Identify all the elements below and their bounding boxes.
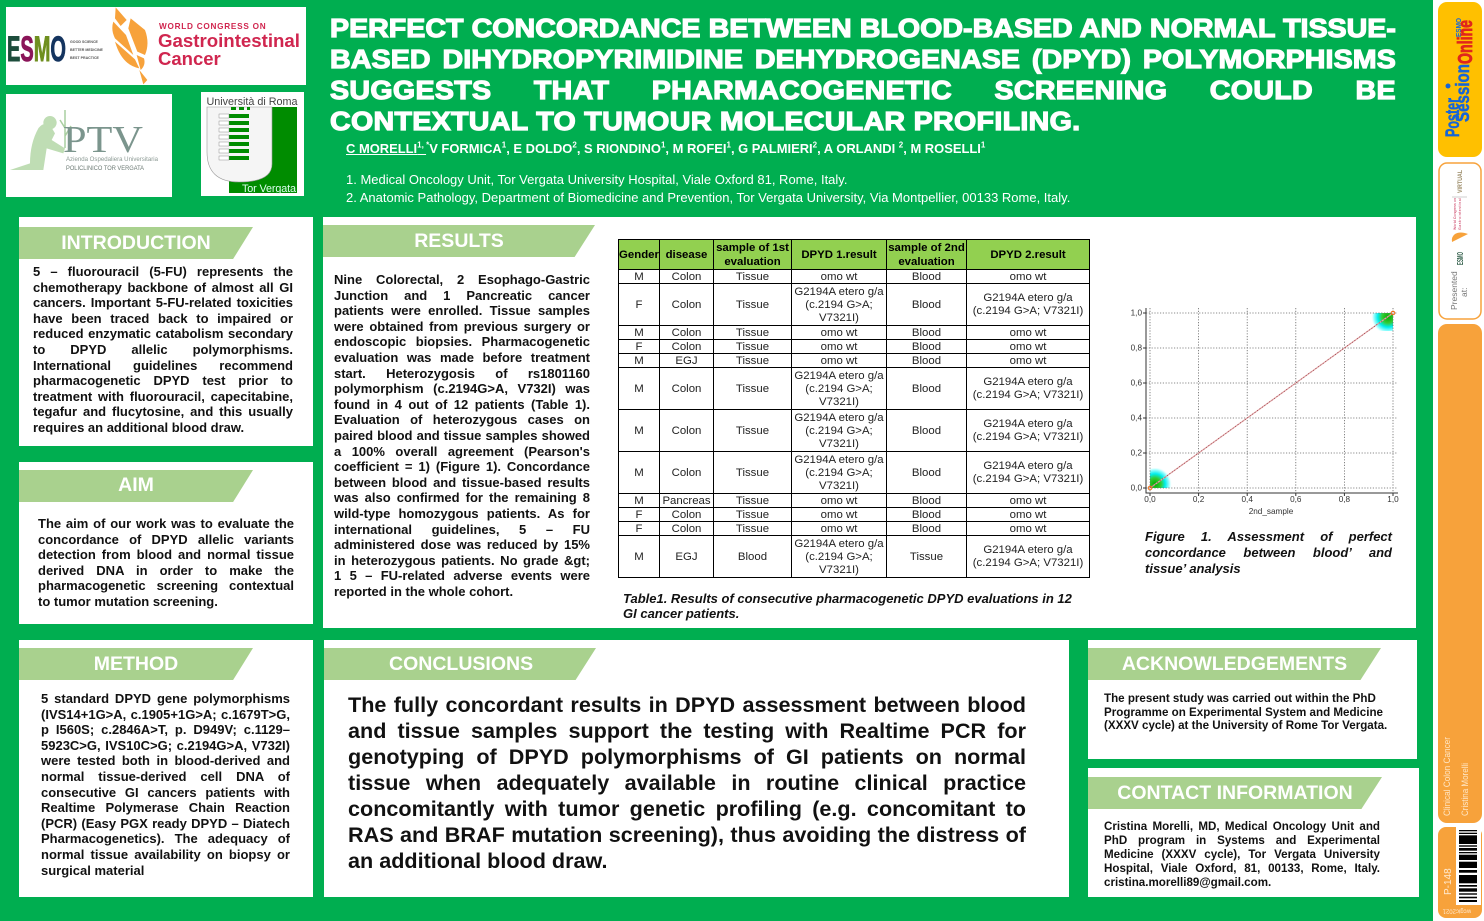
text: results	[334, 272, 590, 599]
text: acknowledgements: Programme on Experimental System and Medicine	[1104, 706, 1383, 718]
chart: scatter of 1st vs 2nd sample: 0,4	[1131, 414, 1142, 422]
text: introduction: International guidelines recommend	[33, 358, 293, 373]
text: introduction	[33, 264, 293, 435]
table: pharmacogenetic results: M	[634, 495, 644, 507]
text: introduction: have been traced back to impaired or	[33, 311, 293, 326]
figure caption: tissue’ analysis	[1145, 560, 1241, 576]
table: pharmacogenetic results: F	[636, 523, 642, 535]
text: aim: derived DNA in order to make the	[38, 563, 294, 578]
text: contact information: PhD program in Systems and Experimental	[1104, 834, 1380, 847]
panel: method	[19, 640, 313, 897]
logo: PTV Policlinico Tor Vergata	[6, 94, 172, 197]
table: pharmacogenetic results: M	[634, 425, 644, 437]
panel: contact information	[1088, 768, 1419, 897]
text: introduction: tegafur and flucytosine, and this usually	[33, 404, 293, 419]
sidebar: presented at panel: Presented	[1449, 271, 1459, 310]
logo: ESMO World Congress on Gastrointestinal Cancer: Cancer	[158, 48, 221, 69]
table: pharmacogenetic results: omo wt	[1010, 327, 1046, 339]
table: pharmacogenetic results: Colon	[672, 341, 701, 353]
table caption: GI cancer patients.	[623, 606, 739, 621]
text: method: consecutive GI cancers patients with	[41, 785, 290, 800]
table: pharmacogenetic results: disease	[666, 248, 707, 260]
table: pharmacogenetic results: Tissue	[736, 509, 769, 521]
sidebar: abstract number and barcode: wcgic2021	[1442, 908, 1472, 914]
icon: leaf	[112, 7, 147, 84]
table: pharmacogenetic results: Colon	[672, 425, 701, 437]
table: pharmacogenetic results: Blood	[912, 271, 941, 283]
logo: ESMO World Congress on Gastrointestinal Cancer: BEST PRACTICE	[70, 56, 100, 60]
table: pharmacogenetic results: (c.2194 G>A; V7321I)	[973, 389, 1083, 401]
table: pharmacogenetic results: G2194A etero g/a	[983, 418, 1073, 430]
text: results: evaluation was made before treatment	[334, 350, 590, 365]
table: pharmacogenetic results: V7321I)	[819, 396, 859, 408]
text: method	[41, 691, 290, 878]
figure caption: concordance between blood’ and	[1145, 544, 1392, 560]
text: method: 5 standard DPYD gene polymorphisms	[41, 691, 290, 706]
text: introduction: chemotherapy backbone of almost all GI	[33, 280, 293, 295]
table: pharmacogenetic results: (c.2194 G>A; V7321I)	[973, 473, 1083, 485]
text: method: Pharmacogenetics). The adequacy of	[41, 831, 290, 846]
heading: conclusions	[324, 648, 596, 680]
table: pharmacogenetic results: omo wt	[821, 495, 857, 507]
heading: aim	[19, 470, 253, 502]
text: conclusions: an additional blood draw.	[348, 848, 608, 873]
heading: method: METHOD	[94, 653, 178, 675]
panel: results	[323, 217, 1416, 628]
table: pharmacogenetic results: G2194A etero g/a	[794, 538, 884, 550]
table: pharmacogenetic results: omo wt	[821, 271, 857, 283]
title: CONTEXTUAL TO TUMOUR MOLECULAR PROFILING.	[330, 106, 1080, 136]
text: conclusions: The fully concordant results in DPYD assessment between blood	[348, 692, 1026, 717]
table: pharmacogenetic results: EGJ	[675, 551, 698, 563]
text: aim: detection from blood and normal tissue	[38, 547, 294, 562]
table: pharmacogenetic results: EGJ	[675, 355, 698, 367]
sidebar: poster session online badge: ESMO	[1456, 17, 1463, 37]
text: contact information	[1104, 820, 1380, 889]
chart: scatter of 1st vs 2nd sample: 0,6	[1290, 495, 1302, 504]
table: pharmacogenetic results: Colon	[672, 383, 701, 395]
table: pharmacogenetic results: Blood	[912, 425, 941, 437]
table: pharmacogenetic results: omo wt	[1010, 271, 1046, 283]
logo: Università di Roma Tor Vergata: Università di Roma	[206, 96, 298, 108]
text: results: Evaluation of heterozygous cases on	[334, 412, 590, 427]
text: introduction: pharmacogenetic DPYD test prior to	[33, 373, 293, 388]
table: pharmacogenetic results: Tissue	[736, 523, 769, 535]
text: introduction: cancers. Important 5-FU-related toxicities	[33, 295, 293, 310]
logo: PTV Policlinico Tor Vergata: Azienda Ospedaliera Universitaria	[66, 156, 159, 163]
sidebar: abstract number and barcode: P-148	[1443, 868, 1454, 895]
table: pharmacogenetic results: (c.2194 G>A;	[805, 467, 873, 479]
table: pharmacogenetic results: omo wt	[1010, 495, 1046, 507]
table: pharmacogenetic results: Tissue	[736, 495, 769, 507]
text: results: start. Heterozygosis of rs1801160	[334, 366, 590, 381]
table: pharmacogenetic results: F	[636, 509, 642, 521]
sidebar: topic and presenter panel: Cristina Morelli	[1460, 763, 1471, 816]
heading: contact information: CONTACT INFORMATION	[1117, 782, 1353, 804]
table: pharmacogenetic results: V7321I)	[819, 564, 859, 576]
table: pharmacogenetic results: Gender	[619, 248, 659, 260]
table: pharmacogenetic results: Blood	[912, 341, 941, 353]
text: results: endoscopic biopsies. Pharmacogenetic	[334, 334, 590, 349]
table: pharmacogenetic results: Blood	[738, 551, 767, 563]
logo: ESMO World Congress on Gastrointestinal Cancer: GOOD SCIENCE	[70, 40, 99, 44]
text: results: coefficient = 1) (Figure 1). Concordance	[334, 459, 590, 474]
table: pharmacogenetic results: Colon	[672, 271, 701, 283]
sidebar: poster session online badge: Session	[1453, 64, 1474, 122]
chart: scatter of 1st vs 2nd sample: 0,2	[1193, 495, 1205, 504]
text: method: were tested both in blood-derived and	[41, 753, 290, 768]
panel: conclusions	[324, 640, 1069, 897]
text: conclusions: tissue when adequately available in routine clinical practice	[348, 770, 1026, 795]
table: pharmacogenetic results: Colon	[672, 467, 701, 479]
text: aim: concordance of DPYD allelic variants	[38, 532, 294, 547]
text: introduction: reduced enzymatic catabolism secondary	[33, 326, 293, 341]
table: pharmacogenetic results: sample of 1st	[716, 242, 789, 254]
logo: PTV Policlinico Tor Vergata: POLICLINICO TOR VERGATA	[66, 165, 145, 172]
chart: scatter of 1st vs 2nd sample: 1,0	[1387, 495, 1399, 504]
text: contact information: Cristina Morelli, MD, Medical Oncology Unit and	[1104, 820, 1380, 833]
table: pharmacogenetic results: V7321I)	[819, 438, 859, 450]
title: SUGGESTS THAT PHARMACOGENETIC SCREENING COULD BE	[330, 74, 1396, 104]
text: results: were obtained from previous surgery or	[334, 319, 590, 334]
sidebar: abstract number and barcode	[1438, 827, 1482, 918]
table: pharmacogenetic results: Tissue	[736, 355, 769, 367]
table: pharmacogenetic results: Blood	[912, 495, 941, 507]
sidebar: topic and presenter panel: Clinical Colon Cancer	[1442, 737, 1453, 816]
sidebar: topic and presenter panel	[1438, 324, 1482, 823]
text: acknowledgements	[1104, 692, 1387, 732]
table: pharmacogenetic results: DPYD 1.result	[801, 248, 877, 260]
table: pharmacogenetic results: G2194A etero g/a	[794, 286, 884, 298]
text: results: in heterozygous patients. No grade &gt;	[334, 553, 590, 568]
heading: acknowledgements	[1088, 648, 1381, 680]
table: pharmacogenetic results: (c.2194 G>A;	[805, 425, 873, 437]
heading: acknowledgements: ACKNOWLEDGEMENTS	[1122, 653, 1347, 675]
table: pharmacogenetic results: Tissue	[910, 551, 943, 563]
text: introduction: requires an additional blood draw.	[33, 420, 244, 435]
text: method: surgical material	[41, 863, 144, 878]
table: pharmacogenetic results: (c.2194 G>A;	[805, 551, 873, 563]
text: conclusions: genotyping of DPYD polymorphisms of GI patients on normal	[348, 744, 1026, 769]
text: method: 5923C>G, IVS10C>G; c.2194G>A, V732I)	[41, 738, 290, 753]
text: results: wild-type homozygous patients. As for	[334, 506, 590, 521]
table: pharmacogenetic results: V7321I)	[819, 480, 859, 492]
text: results: was also confirmed for the remaining 8	[334, 490, 590, 505]
heading: method	[19, 648, 253, 680]
table: pharmacogenetic results: Tissue	[736, 425, 769, 437]
heading: results	[323, 225, 595, 257]
table: pharmacogenetic results: DPYD 2.result	[990, 248, 1066, 260]
table: pharmacogenetic results: omo wt	[821, 341, 857, 353]
chart: scatter of 1st vs 2nd sample: 0,4	[1242, 495, 1253, 504]
heading: conclusions: CONCLUSIONS	[389, 653, 533, 675]
table: pharmacogenetic results: G2194A etero g/a	[983, 460, 1073, 472]
text: results: administered dose was reduced by 15%	[334, 537, 590, 552]
chart: scatter of 1st vs 2nd sample: 1,0	[1131, 308, 1142, 318]
sidebar: presented at panel: VIRTUAL	[1458, 170, 1464, 193]
title: PERFECT CONCORDANCE BETWEEN BLOOD-BASED AND NORMAL TISSUE-	[330, 12, 1396, 42]
text: introduction: treatment with fluorouracil, capecitabine,	[33, 389, 293, 404]
text: conclusions: concomitantly with tumor genetic profiling (e.g. concomitant to	[348, 796, 1026, 821]
table: pharmacogenetic results: F	[636, 341, 642, 353]
table: pharmacogenetic results: Blood	[912, 467, 941, 479]
text: acknowledgements: The present study was carried out within the PhD	[1104, 692, 1376, 705]
table: pharmacogenetic results: M	[634, 551, 644, 563]
title: BASED DIHYDROPYRIMIDINE DEHYDROGENASE (DPYD) POLYMORPHISMS	[330, 44, 1396, 74]
logo: ESMO World Congress on Gastrointestinal Cancer: ESMO	[7, 30, 66, 69]
table: pharmacogenetic results: M	[634, 355, 644, 367]
text: method: (PCR) (Easy PGX ready DPYD – Diatech	[41, 816, 290, 831]
sidebar: presented at panel: at:	[1459, 288, 1469, 297]
table: pharmacogenetic results: sample of 2nd	[888, 242, 965, 254]
table: pharmacogenetic results: G2194A etero g/a	[983, 544, 1073, 556]
table: pharmacogenetic results: Blood	[912, 327, 941, 339]
text: results: patients were enrolled. Tissue samples	[334, 303, 590, 318]
table: pharmacogenetic results: Colon	[672, 509, 701, 521]
text: results: a 100% overall agreement (Pearson's	[334, 444, 590, 459]
text: results: found in 4 out of 12 patients (Table 1).	[334, 397, 590, 412]
text: contact information: Medicine (XXXV cycle), Tor Vergata University	[1104, 848, 1380, 861]
text: aim: to tumor mutation screening.	[38, 594, 218, 609]
table: pharmacogenetic results: Blood	[912, 355, 941, 367]
sidebar: poster session online badge: Poster	[1443, 98, 1464, 137]
chart: scatter of 1st vs 2nd sample: 0,0	[1131, 484, 1142, 492]
table: pharmacogenetic results: Blood	[912, 509, 941, 521]
text: acknowledgements: (XXXV cycle) at the University of Rome Tor Vergata.	[1104, 719, 1387, 732]
table: pharmacogenetic results: Blood	[912, 299, 941, 311]
text: introduction: to DPYD allelic polymorphisms.	[33, 342, 293, 357]
table: pharmacogenetic results: omo wt	[1010, 355, 1046, 367]
logo: Università di Roma Tor Vergata	[201, 92, 304, 196]
figure caption	[1145, 528, 1392, 576]
authors: C MORELLI1, *V FORMICA1, E DOLDO2, S RIONDINO1, M ROFEI1, G PALMIERI2, A ORLANDI 2, M ROSELLI1	[346, 141, 985, 156]
table caption: Table1. Results of consecutive pharmacogenetic DPYD evaluations in 12	[623, 591, 1072, 606]
table: pharmacogenetic results: Blood	[912, 523, 941, 535]
table: pharmacogenetic results: omo wt	[1010, 341, 1046, 353]
table: pharmacogenetic results: (c.2194 G>A; V7321I)	[973, 431, 1083, 443]
logo: ESMO World Congress on Gastrointestinal Cancer: WORLD CONGRESS ON	[159, 22, 266, 31]
text: aim: The aim of our work was to evaluate the	[38, 516, 294, 531]
table: pharmacogenetic results: (c.2194 G>A; V7321I)	[973, 305, 1083, 317]
chart: scatter of 1st vs 2nd sample: 0,6	[1131, 378, 1142, 388]
text: results: reported in the whole cohort.	[334, 584, 513, 599]
table: pharmacogenetic results: Tissue	[736, 341, 769, 353]
table: pharmacogenetic results: Pancreas	[662, 495, 711, 507]
heading: introduction: INTRODUCTION	[61, 232, 211, 254]
chart: scatter of 1st vs 2nd sample: 0,8	[1131, 344, 1142, 352]
table: pharmacogenetic results: G2194A etero g/a	[983, 292, 1073, 304]
table: pharmacogenetic results: Tissue	[736, 271, 769, 283]
logo: Università di Roma Tor Vergata: Tor Vergata	[242, 183, 296, 195]
text: results: paired blood and tissue samples showed	[334, 428, 590, 443]
panel: introduction	[19, 217, 313, 446]
table: pharmacogenetic results: Blood	[912, 383, 941, 395]
sidebar: presented at panel: World Congress on	[1453, 198, 1457, 230]
table: pharmacogenetic results: evaluation	[898, 256, 955, 268]
affiliations	[346, 172, 1070, 205]
panel: aim	[19, 462, 313, 624]
table: pharmacogenetic results: V7321I)	[819, 312, 859, 324]
table: pharmacogenetic results: evaluation	[724, 256, 781, 268]
text: aim: pharmacogenetic screening contextual	[38, 578, 294, 593]
chart: scatter of 1st vs 2nd sample: 2nd_sample	[1249, 507, 1294, 516]
sidebar: presented at panel: Gastrointestinal	[1458, 198, 1462, 230]
text: introduction: 5 – fluorouracil (5-FU) represents the	[33, 264, 293, 279]
text: conclusions	[348, 692, 1026, 873]
table: pharmacogenetic results: G2194A etero g/a	[794, 370, 884, 382]
table: pharmacogenetic results: omo wt	[821, 327, 857, 339]
text: conclusions: and tissue samples support the testing with Realtime PCR for	[348, 718, 1026, 743]
logo: ESMO World Congress on Gastrointestinal Cancer: Gastrointestinal	[158, 30, 300, 51]
heading: contact information	[1088, 777, 1382, 809]
text: method: Realtime Polymerase Chain Reaction	[41, 800, 290, 815]
table: pharmacogenetic results: omo wt	[1010, 523, 1046, 535]
text: results: Junction and 1 Pancreatic cancer	[334, 288, 590, 303]
text: aim	[38, 516, 294, 609]
figure caption: Figure 1. Assessment of perfect	[1145, 528, 1392, 544]
chart: scatter of 1st vs 2nd sample: 0,0	[1144, 495, 1156, 504]
logo: ESMO World Congress on Gastrointestinal Cancer: BETTER MEDICINE	[70, 48, 104, 52]
text: results: between blood and tissue-based results	[334, 475, 590, 490]
table: pharmacogenetic results: omo wt	[821, 355, 857, 367]
table: pharmacogenetic results: Tissue	[736, 383, 769, 395]
logo: PTV Policlinico Tor Vergata: PTV	[63, 119, 144, 161]
text: method: normal tissue availability on biopsy or	[41, 847, 290, 862]
table: pharmacogenetic results: (c.2194 G>A;	[805, 383, 873, 395]
affiliations: 1. Medical Oncology Unit, Tor Vergata University Hospital, Viale Oxford 81, Rome, Italy.	[346, 172, 847, 187]
table: pharmacogenetic results: Colon	[672, 523, 701, 535]
text: results: international guidelines, 5 – FU	[334, 522, 590, 536]
text: contact information: cristina.morelli89@gmail.com.	[1104, 876, 1271, 889]
panel: acknowledgements	[1088, 640, 1417, 759]
logo: ESMO World Congress on Gastrointestinal Cancer	[6, 7, 306, 85]
sidebar: presented at panel: ESMO	[1456, 252, 1465, 265]
chart: scatter of 1st vs 2nd sample	[1130, 308, 1399, 516]
table: pharmacogenetic results: F	[636, 299, 642, 311]
chart: scatter of 1st vs 2nd sample: 0,2	[1131, 448, 1142, 458]
table: pharmacogenetic results: G2194A etero g/a	[794, 412, 884, 424]
sidebar: presented at panel	[1438, 162, 1482, 320]
text: contact information: Hospital, Viale Oxford, 81, 00133, Rome, Italy.	[1104, 862, 1380, 875]
table: pharmacogenetic results	[618, 239, 1090, 578]
table: pharmacogenetic results: M	[634, 271, 644, 283]
text: results: 1 5 – FU-related adverse events were	[334, 568, 590, 583]
text: method: normal tissue-derived cell DNA of	[41, 769, 290, 784]
sidebar: poster session online badge: Online	[1455, 20, 1477, 64]
text: conclusions: RAS and BRAF mutation screening), thus avoiding the distress of	[348, 822, 1026, 847]
text: results: polymorphism (c.2194G>A, V732I) was	[334, 381, 590, 396]
text: method: (IVS14+1G>A, c.1905+1G>A; c.1679T>G,	[41, 707, 290, 722]
table caption	[623, 591, 1072, 621]
table: pharmacogenetic results: M	[634, 467, 644, 479]
heading: introduction	[19, 227, 253, 259]
table: pharmacogenetic results: M	[634, 383, 644, 395]
table: pharmacogenetic results: (c.2194 G>A;	[805, 299, 873, 311]
text: results: Nine Colorectal, 2 Esophago-Gastric	[334, 272, 590, 287]
table: pharmacogenetic results: Colon	[672, 299, 701, 311]
table: pharmacogenetic results: Tissue	[736, 299, 769, 311]
table: pharmacogenetic results: M	[634, 327, 644, 339]
table: pharmacogenetic results: G2194A etero g/a	[794, 454, 884, 466]
chart: scatter of 1st vs 2nd sample: 0,8	[1339, 495, 1351, 504]
heading: aim: AIM	[118, 474, 154, 496]
table: pharmacogenetic results: omo wt	[1010, 509, 1046, 521]
title	[330, 12, 1396, 136]
table: pharmacogenetic results: Tissue	[736, 327, 769, 339]
table: pharmacogenetic results: omo wt	[821, 509, 857, 521]
table: pharmacogenetic results: Tissue	[736, 467, 769, 479]
sidebar: poster session online badge	[1438, 2, 1482, 157]
table: pharmacogenetic results: G2194A etero g/a	[983, 376, 1073, 388]
text: method: p I560S; c.2846A>T, p. D949V; c.1129–	[41, 722, 290, 737]
table: pharmacogenetic results: omo wt	[821, 523, 857, 535]
affiliations: 2. Anatomic Pathology, Department of Biomedicine and Prevention, Tor Vergata University, Via Montpellier, 00133 Rome, Italy.	[346, 190, 1070, 205]
table: pharmacogenetic results: Colon	[672, 327, 701, 339]
heading: results: RESULTS	[414, 230, 504, 252]
table: pharmacogenetic results: (c.2194 G>A; V7321I)	[973, 557, 1083, 569]
